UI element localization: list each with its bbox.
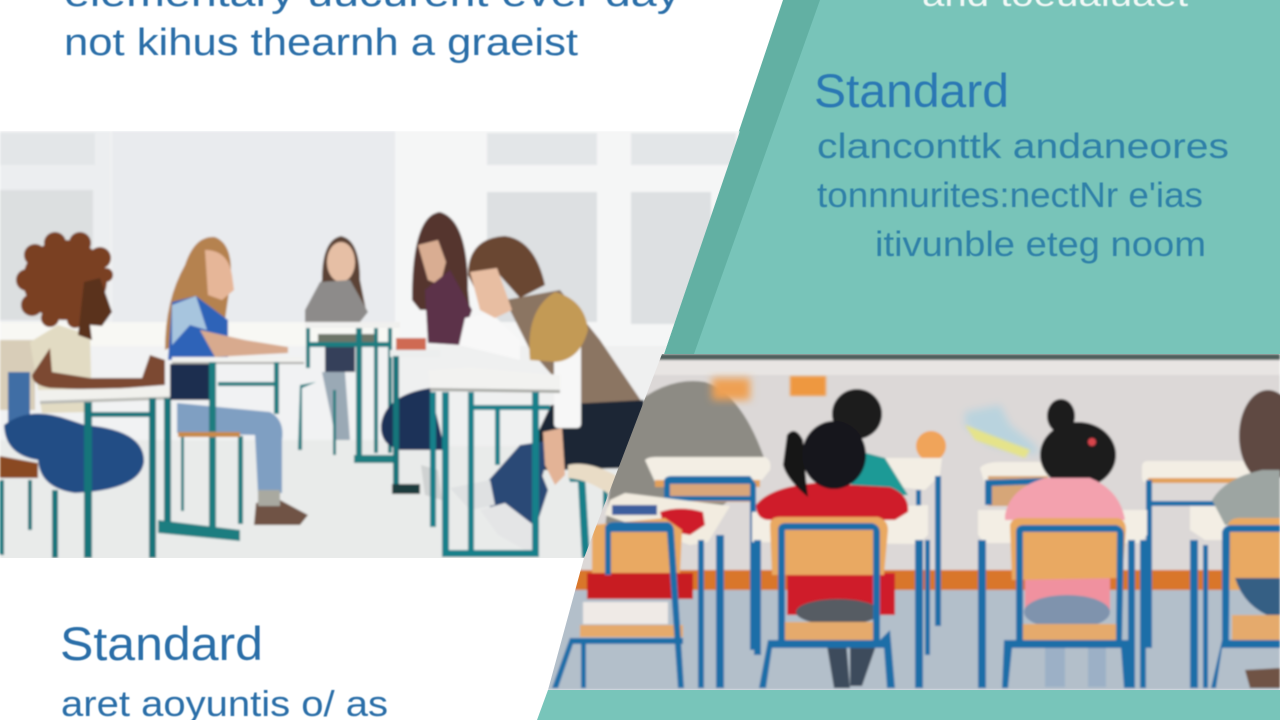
- panel: bottom teal strip: [537, 690, 1280, 720]
- child's chair centre: [759, 517, 895, 688]
- panel: top right teal: [664, 0, 1280, 354]
- back row desks: [645, 457, 1250, 650]
- photo: children seen from behind in colourful classroom: [540, 354, 1280, 690]
- child's chair right centre: [1002, 518, 1132, 688]
- child's chair left with red jacket: [552, 508, 705, 688]
- heading: Standard on teal panel: Standard: [814, 64, 1009, 117]
- text block: top left second line: not kihus thearnh a graeist: [64, 22, 578, 64]
- heading: Standard on bottom white panel: Standard: [60, 617, 263, 670]
- text block: teal panel body: clanconttk andaneores: [817, 127, 1229, 166]
- back wall, board and floor: [540, 354, 1280, 690]
- child with black pigtails in red jacket: [756, 389, 908, 688]
- child with bun in pink top: [1005, 399, 1125, 687]
- child with brown hair on right edge: [1211, 390, 1280, 688]
- classroom wall and windows: [0, 131, 740, 561]
- text block: teal panel body: tonnnurites:nectNr e'ias: [817, 176, 1203, 215]
- child in purple sweater: [381, 212, 472, 500]
- text block: teal panel body: itivunble eteg noom: [875, 225, 1206, 264]
- text block: teal panel body: [817, 127, 1229, 264]
- child in blue shirt: [158, 237, 308, 541]
- front row desks: [605, 493, 1280, 688]
- child with blonde hair leaning over desk: [428, 236, 645, 558]
- photo: children at desks in bright classroom: [0, 131, 740, 561]
- child with curly hair: [0, 232, 185, 558]
- smiling child at back desk: [298, 236, 400, 463]
